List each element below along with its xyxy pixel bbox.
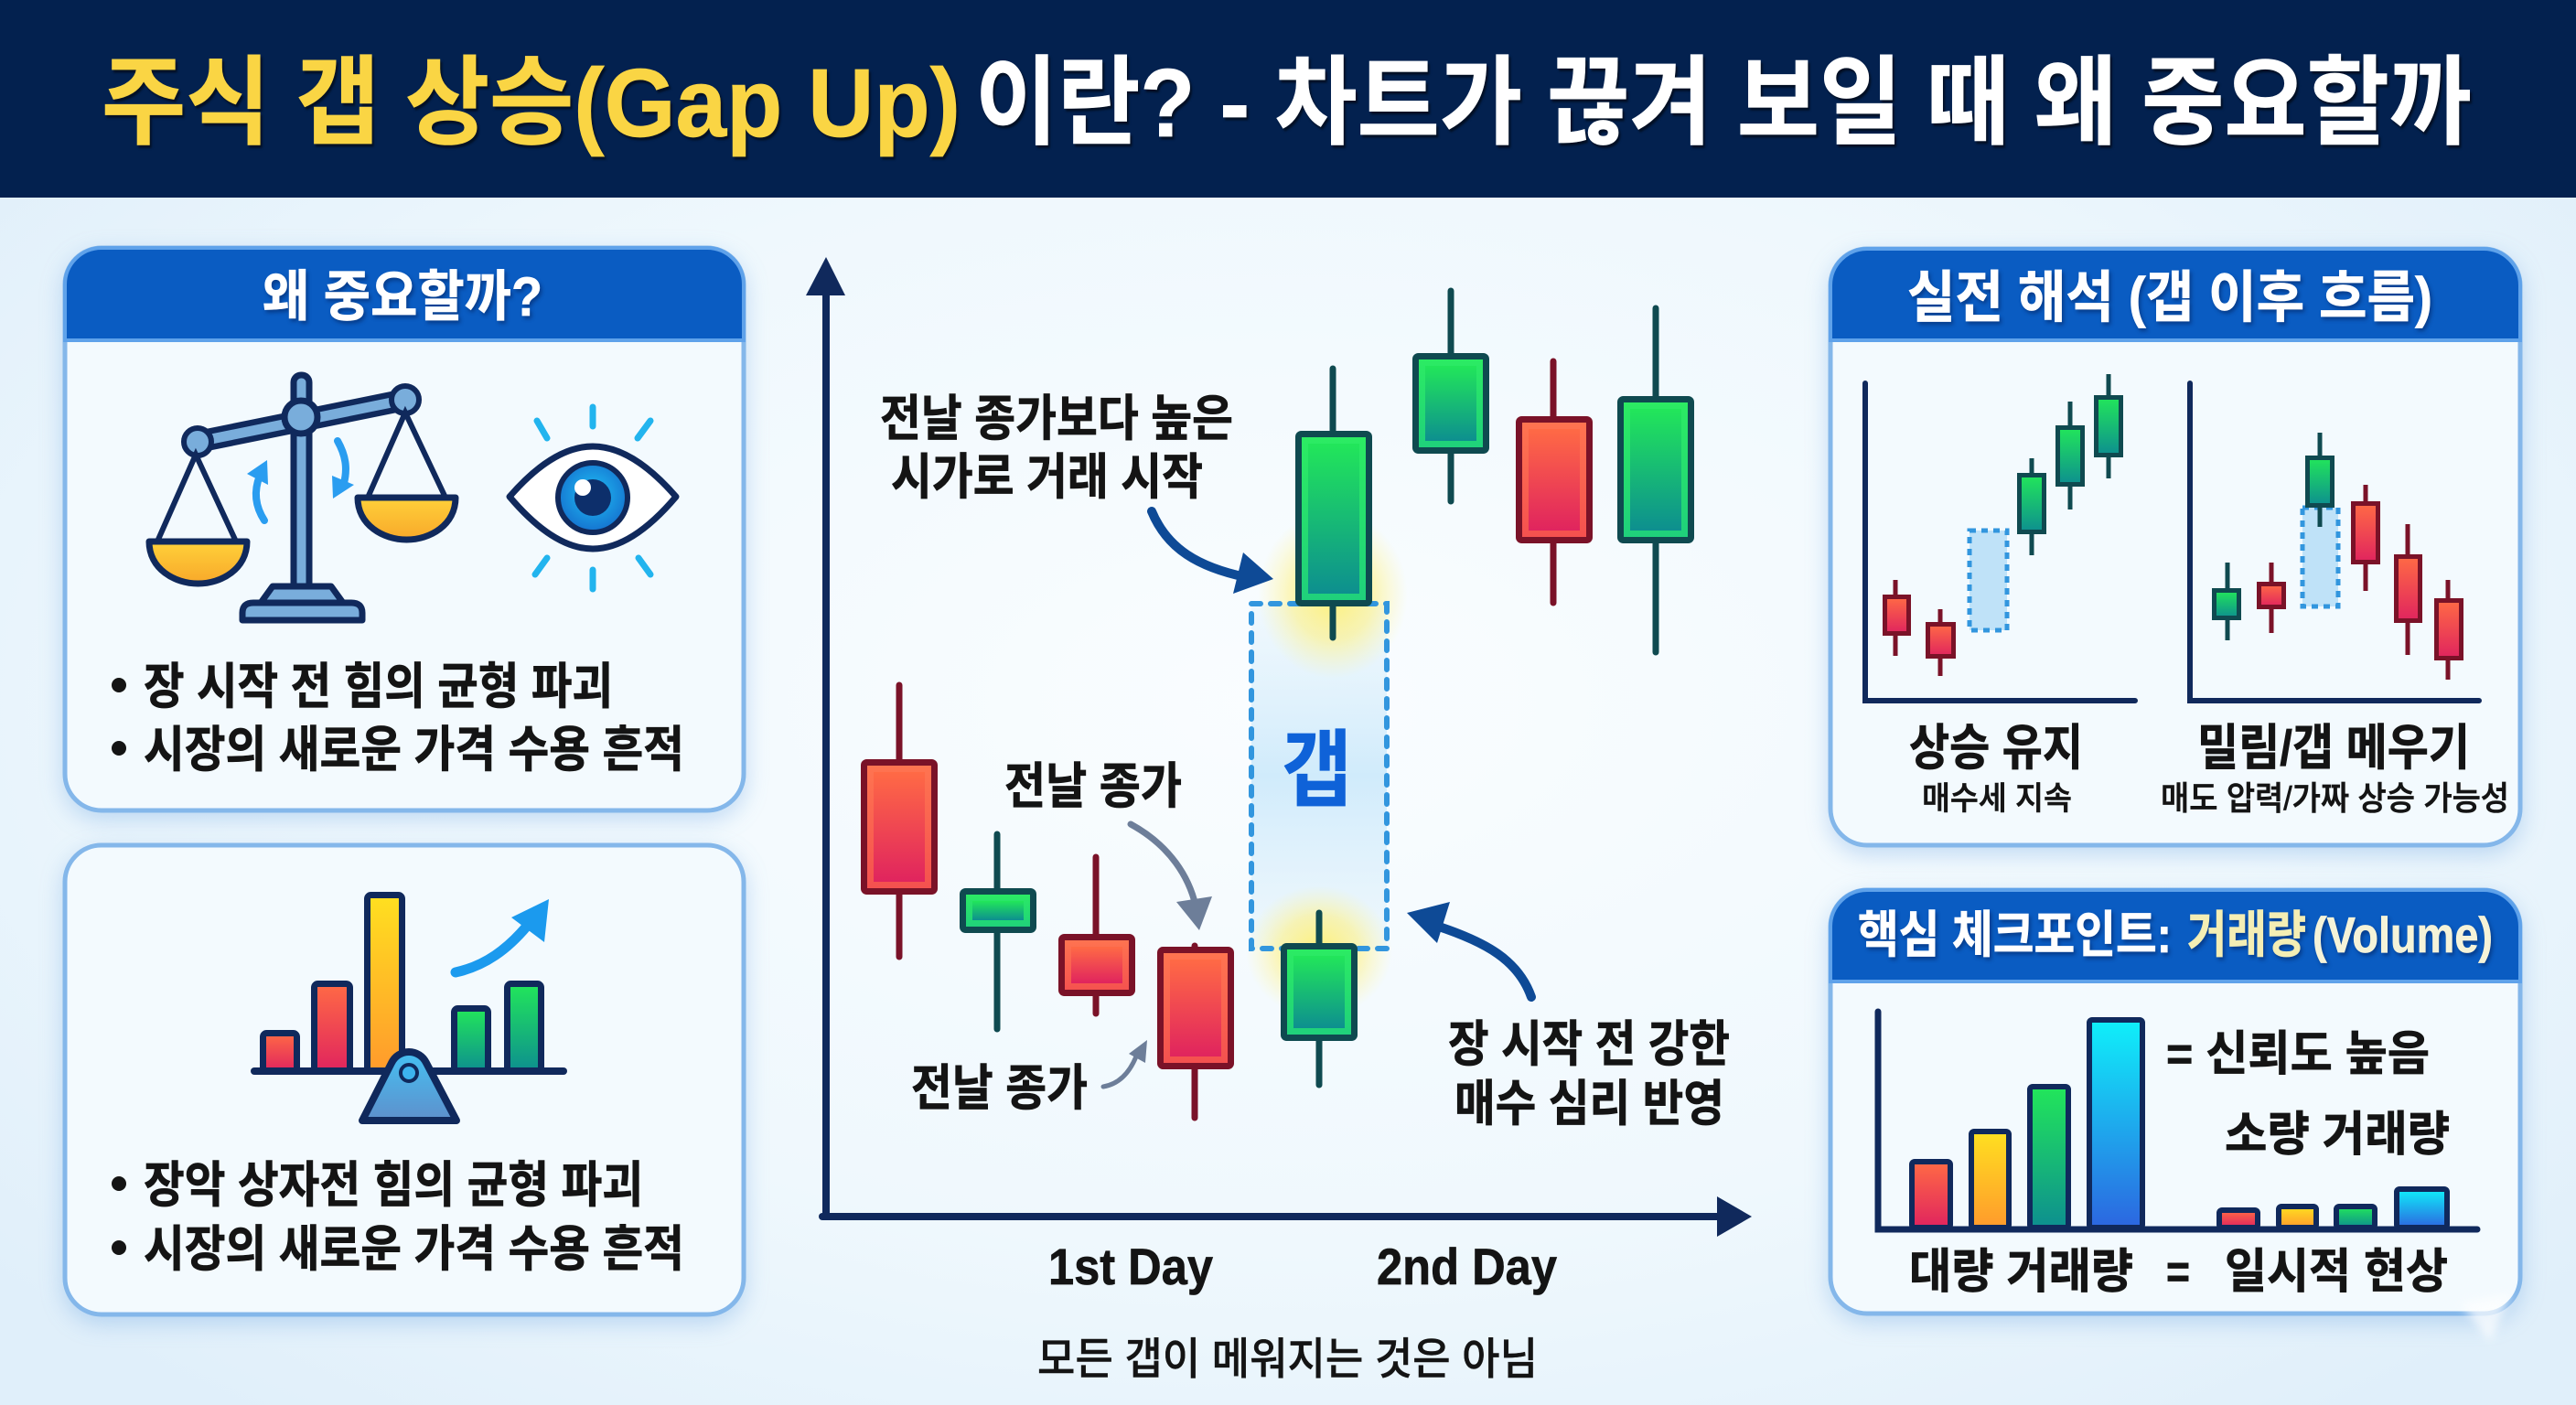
- callout: premarket buying sentiment: 매수 심리 반영: [1454, 1077, 1724, 1132]
- footnote: 모든 갭이 메워지는 것은 아님: [1037, 1335, 1538, 1384]
- label: prior close bottom: 전날 종가: [911, 1061, 1088, 1116]
- bullet text: 시장의 새로운 가격 수용 흔적: [144, 1222, 684, 1277]
- arrow: gray small up: [1103, 1040, 1147, 1087]
- bullet text: [112, 1158, 684, 1277]
- panel heading: 핵심 체크포인트:: [1858, 906, 2172, 963]
- volume bar chart: [1878, 1012, 2477, 1229]
- callout: premarket buying sentiment: 장 시작 전 강한: [1448, 1017, 1730, 1072]
- axes: [806, 257, 1752, 1237]
- day 1 candles: [864, 685, 1231, 1118]
- panel: why it matters: [65, 248, 744, 810]
- arrow: to opening candle: [1152, 511, 1273, 594]
- arrow: gray down to close: [1131, 824, 1212, 930]
- panel heading: 거래량: [2187, 906, 2306, 963]
- panel heading: (Volume): [2313, 906, 2493, 963]
- label: temporary phenomenon: 일시적 현상: [2225, 1246, 2448, 1299]
- label: high volume: 대량 거래량: [1909, 1246, 2133, 1299]
- callout: premarket buying sentiment: [1448, 1017, 1730, 1132]
- label: temporary phenomenon: =: [2166, 1246, 2190, 1299]
- axis labels: 2nd Day: [1377, 1238, 1557, 1295]
- caption: gap fill: 밀림/갭 메우기: [2197, 721, 2470, 776]
- title: white part: 이란? - 차트가 끊겨 보일 때 왜 중요할까: [975, 49, 2472, 157]
- callout: opens higher than prior close: 시가로 거래 시작: [891, 450, 1203, 505]
- label: prior close top: 전날 종가: [1004, 759, 1182, 814]
- caption: trend holds: [1909, 721, 2083, 817]
- panel heading: 실전 해석 (갭 이후 흐름): [1907, 266, 2432, 328]
- callout: opens higher than prior close: 전날 종가보다 높은: [880, 391, 1233, 446]
- callout: opens higher than prior close: [880, 391, 1233, 505]
- icon: eye: [510, 407, 676, 589]
- axis labels: 1st Day: [1048, 1238, 1213, 1295]
- bullet text: 장악 상자전 힘의 균형 파괴: [144, 1158, 643, 1213]
- title: yellow part: 주식 갭 상승(Gap Up): [102, 49, 961, 157]
- gap label: 갭: [1282, 724, 1352, 818]
- gap zone: [1246, 510, 1408, 1017]
- axis labels: [1048, 1238, 1557, 1295]
- day 2 candles: [1284, 291, 1690, 1085]
- icon: rising arrow: [456, 899, 549, 972]
- panel heading: 왜 중요할까?: [263, 266, 542, 327]
- panel: key checkpoint volume: [1830, 890, 2520, 1314]
- panel: balance broken: [65, 845, 744, 1314]
- bullet text: 시장의 새로운 가격 수용 흔적: [144, 723, 684, 778]
- title banner: [0, 0, 2576, 198]
- mini chart: gap fill: [2190, 383, 2479, 701]
- label: high reliability: = 신뢰도 높음: [2166, 1028, 2430, 1081]
- icon: bars on seesaw: [254, 895, 564, 1121]
- caption: gap fill: [2161, 721, 2509, 817]
- label: low volume: 소량 거래량: [2225, 1109, 2450, 1162]
- panel: practical interpretation: [1830, 249, 2520, 845]
- caption: trend holds: 매수세 지속: [1922, 781, 2072, 817]
- mini chart: trend holds: [1865, 374, 2135, 701]
- chart: main gap up candlestick: [806, 257, 1752, 1295]
- bullet text: 장 시작 전 힘의 균형 파괴: [144, 660, 613, 714]
- arrow: blue to gap: [1407, 902, 1531, 997]
- icon: balance scale: [149, 375, 456, 620]
- caption: gap fill: 매도 압력/가짜 상승 가능성: [2161, 779, 2509, 817]
- caption: trend holds: 상승 유지: [1909, 721, 2083, 776]
- bullet text: [112, 660, 684, 778]
- panel heading: [1858, 906, 2493, 963]
